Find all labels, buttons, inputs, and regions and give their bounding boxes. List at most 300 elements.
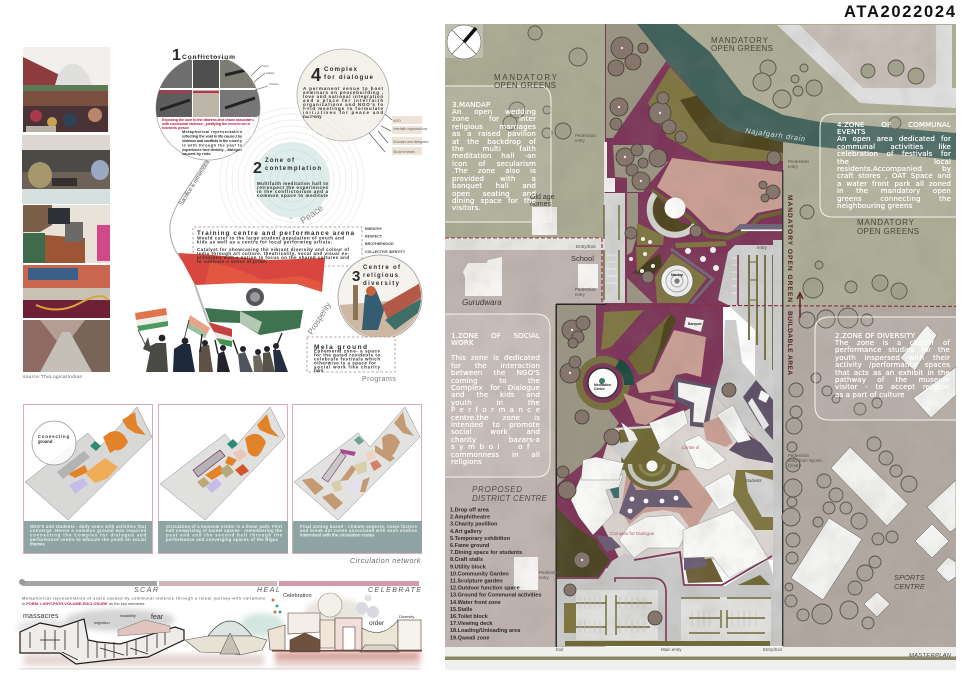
journey description: in FORM, LIGHT,PATH,VOLUME,ENCLOSURE as the key elements.: [22, 601, 145, 606]
value labels: COLLECTIVE IDENTITY: [365, 250, 406, 254]
zone text: social work: 1.ZONE OF SOCIAL: [451, 331, 540, 340]
bottom olive band: [565, 641, 770, 646]
texture overlay: [445, 24, 956, 647]
caption panel: [293, 521, 422, 553]
heading centre of religious diversity: religious: [363, 273, 399, 279]
flower garden parcel: [675, 241, 727, 248]
complex description: initiatives for peace and: [303, 110, 383, 115]
value labels: EMPATHY: [365, 227, 383, 231]
caption text: [166, 524, 283, 542]
complex for dialogue: white buildings: [571, 457, 768, 578]
tree highlights: [569, 47, 661, 561]
program: mela ground: [307, 337, 395, 373]
arrows: user groups: [251, 64, 279, 90]
orange zones: [205, 414, 279, 480]
place labels: homes: [530, 201, 552, 208]
exterior trees: sports centre: [782, 308, 917, 629]
complex description: [303, 86, 384, 119]
zone text: social work: social work and: [451, 427, 540, 436]
training description: India through art culture, theatricality, vocal and visual ex-: [197, 251, 350, 256]
banquet hall: Banquet: [688, 322, 702, 326]
zone text: mandap: .The zone also is: [452, 166, 536, 175]
purple service band: [729, 433, 773, 463]
grey deck: [608, 440, 638, 460]
zone text: mandap: the multi faith: [452, 144, 536, 153]
entry labels: Centre: [788, 463, 802, 468]
zone text: diversity: [834, 330, 950, 399]
zone text: mandap: as a raised pavilion: [452, 129, 536, 138]
zone text: social work: intended to promote: [451, 420, 540, 429]
orange zones: [68, 412, 146, 478]
arrows: user groups: Adults: [266, 71, 275, 75]
journey labels: CELEBRATE: [368, 587, 423, 594]
lower pink plaza: [623, 393, 674, 425]
confetti cluster: [272, 598, 282, 614]
connecting ground circle: [32, 421, 76, 465]
place labels: [462, 194, 594, 307]
district centre legend: 2.Amphitheatre: [450, 515, 490, 521]
right parking bays: [681, 597, 771, 642]
label: sports centre: SPORTS: [894, 573, 925, 582]
heading mela ground: Mela ground: [314, 344, 367, 351]
caption text: Circulation of a museum visitor is a linear path- First: [166, 524, 283, 529]
entry labels: entry from Sports: [788, 458, 822, 463]
zone outline: diversity: [815, 317, 956, 420]
section keywords: order: [369, 620, 385, 627]
upper green parcel: [606, 24, 667, 138]
zone text: mandap: dining space for the: [452, 196, 536, 205]
zone text: communal events: residents.Accompanied by: [837, 164, 951, 173]
small grey parcel: [627, 193, 638, 255]
section keywords: Celebration: [283, 593, 312, 599]
heading complex for dialogue: for dialogue: [324, 74, 374, 81]
program 3: centre of religious diversity: [338, 255, 422, 340]
complex description: harmony: [303, 114, 322, 119]
connecting journey curve: [170, 150, 293, 272]
training description: [197, 236, 350, 264]
photo: seated musicians: [22, 135, 110, 204]
label: proposed district centre: PROPOSED: [472, 485, 522, 494]
centre label: Centre of: [682, 445, 700, 450]
place labels: Gurudwara: [462, 298, 502, 307]
caption text: halt comprising of tunnel spaces - remembering the: [166, 528, 283, 533]
zone text: communal events: craft stores , OAT Space and: [837, 171, 951, 180]
labels: mandatory open greens: MANDATORY: [711, 36, 769, 45]
scar segment: [22, 581, 157, 586]
contemplation description: common space to meditate: [257, 193, 329, 198]
zone text: social work: commonness in all: [451, 450, 540, 459]
zone text: diversity: The zone is a cluster of: [835, 338, 950, 347]
mela description: otherwise is a space for: [314, 360, 376, 366]
service strip: [733, 224, 783, 230]
drain label: Najafgarh drain: [745, 126, 806, 143]
section drawing: [17, 593, 422, 669]
arrows: user groups: Youth: [261, 64, 269, 68]
multi-faith olive ring: [576, 356, 630, 410]
heading zone of contemplation: contemplation: [265, 166, 321, 172]
entry labels: Entry/Exit: [763, 647, 783, 652]
label: prosperity: Prosperity: [306, 301, 333, 336]
celebration buildings: [268, 613, 421, 652]
parking stripes: [748, 398, 769, 430]
training description: Catalyst for showcasing the vibrant diversity and colour of: [197, 247, 350, 252]
conflictorium description: experience true divinity , dialogue: [182, 147, 243, 152]
heal ramps: [185, 636, 267, 655]
left parking border: [615, 578, 666, 642]
heading centre of religious diversity: [363, 265, 401, 287]
heading centre of religious diversity: Centre of: [363, 265, 401, 271]
photo strip: communities and gatherings: [22, 47, 110, 379]
conflictorium description: caused by riots: [182, 151, 211, 156]
banquet hall: [684, 317, 704, 332]
entry labels: Main entry: [661, 647, 682, 652]
number one: 1: [172, 47, 181, 64]
conflictorium description: [182, 129, 243, 156]
top right road: [777, 25, 956, 108]
stakeholder tags: Scholars and delegates: [393, 140, 429, 144]
drain: [637, 24, 956, 160]
red flag band: [178, 253, 325, 292]
place labels: Old age: [530, 194, 555, 201]
zone text: communal events: the local: [837, 157, 951, 166]
stakeholder tags: Student heads: [393, 150, 415, 154]
upper gallery roof: [118, 620, 170, 636]
green flag band: [205, 308, 303, 335]
entry labels: Pedestrian: [788, 159, 810, 164]
connecting ground label: [38, 434, 69, 444]
studio pink court: [703, 417, 733, 447]
mela description: fairs: [314, 368, 324, 373]
zone text: mandap: visitors.: [452, 203, 481, 212]
place labels: School: [571, 254, 594, 263]
site massing: [294, 407, 420, 520]
purple hatch court: [619, 480, 693, 520]
green pavilion: [90, 441, 101, 451]
caption panel: [158, 521, 288, 553]
firework tree: [318, 593, 342, 617]
district centre legend: 15.Stalls: [450, 607, 472, 613]
zone text: mandap: meditation hall -an: [452, 151, 536, 160]
lower olive parcel B: [628, 313, 676, 375]
journey description: [22, 596, 265, 606]
section keywords: massacres: [23, 613, 59, 620]
contemplation description: in the conflictorium and a: [257, 189, 329, 194]
caption text: past and and the second halt through the: [166, 532, 283, 538]
land: left green: [445, 24, 607, 238]
district centre legend: 16.Toilet block: [450, 614, 489, 620]
district centre legend: 6.Fame ground: [450, 543, 489, 549]
journey labels: SCAR: [134, 587, 159, 594]
journey labels: HEAL: [257, 587, 281, 594]
zone text: social work: between the NGO'S: [451, 368, 540, 377]
title: project code: ATA2022024: [844, 3, 956, 21]
section base: [272, 650, 422, 652]
bottom road: [445, 647, 956, 670]
zone text: communal events: An open area dedicated for: [837, 134, 951, 143]
conflictorium photo collage: [156, 60, 262, 117]
conflictorium description: is with through the past to: [182, 142, 243, 148]
section keywords: Instability: [120, 614, 136, 618]
fireworks: [356, 594, 379, 618]
gallery hatching: [30, 622, 165, 660]
zone outline: social work: [445, 314, 550, 477]
zone text: social work: WORK: [451, 338, 474, 347]
caption text: NGO'S and students - daily users with activities that: [30, 524, 147, 529]
graphic: indian flag and crowd: [135, 253, 325, 372]
zone outline: communal events: [820, 114, 956, 217]
road boundary strip: [773, 240, 783, 646]
dark garden cell: [632, 253, 662, 277]
lower parking ground: [556, 553, 773, 646]
entry labels: Pedestrian: [575, 287, 597, 292]
zone text: mandap: An open wedding: [452, 107, 536, 116]
zone text: social work: and the kids and: [451, 390, 540, 399]
district centre legend: 5.Temporary exhibition: [450, 536, 511, 542]
grey-green parcel by rotunda: [627, 278, 653, 303]
mandap arc: [650, 194, 695, 235]
compass: [445, 24, 483, 59]
site massing: [25, 407, 152, 520]
entry labels: entry: [575, 292, 586, 297]
zone text: social work: Complex for Dialogue: [451, 383, 540, 392]
zone text: social work: Performance: [451, 405, 544, 414]
grey hall: [57, 451, 90, 479]
zone text: mandap: open seating and: [452, 189, 536, 198]
zone text: communal events: celebration of festivals for: [837, 149, 951, 158]
entry labels: Pedestrian: [788, 453, 810, 458]
arrows: user groups: Visitors: [269, 82, 279, 86]
zone text: social work: youth in the: [451, 398, 540, 407]
tree parcel: [613, 145, 668, 192]
zone text: communal events: neighbouring greens: [837, 201, 912, 210]
sports centre buildings: [791, 325, 956, 617]
land: right green: [640, 24, 956, 307]
number four: 4: [311, 65, 321, 85]
labels: mandatory open greens: OPEN GREENS: [857, 227, 919, 236]
zone text: mandap: at the backdrop of: [452, 137, 536, 146]
water pool: [608, 485, 619, 498]
zone text: social work: centre.the zone is: [451, 413, 540, 422]
zone text: communal events: communal activities like: [837, 142, 951, 151]
mela description: for the gated residents to: [314, 352, 380, 358]
zone text: diversity: 2.ZONE OF DIVERSITY: [835, 330, 915, 340]
ashoka chakra: [246, 288, 264, 306]
heading training centre: Training centre and performance arena: [197, 230, 355, 237]
labels: mandatory open greens: MANDATORY: [494, 73, 558, 82]
zone text: communal events: greens connecting the: [837, 194, 951, 203]
zone text: mandap: religious marriages: [452, 122, 536, 131]
rotunda walkway: [671, 249, 713, 305]
lower site ground: [556, 304, 773, 577]
zone text: mandap: zone for inter: [452, 114, 536, 123]
journey labels: [134, 587, 423, 594]
complex description: A permanent venue to host: [303, 86, 384, 91]
mela description: social work like charity: [314, 364, 381, 370]
small white block: [758, 390, 770, 403]
caption text: and break out zones associated with each studios: [300, 528, 418, 533]
parcel maroon edge: [556, 545, 772, 585]
connecting ground label: Connecting: [38, 434, 69, 439]
amphitheatre: [624, 460, 680, 490]
entry road: [445, 239, 605, 250]
purple surround to music studio: [674, 378, 716, 428]
photo: panel discussion: [23, 265, 110, 318]
caption text: [30, 524, 147, 546]
complex label: Complex for Dialogue: [610, 531, 655, 536]
district centre legend: 11.Sculpture garden: [450, 578, 503, 584]
silhouettes of people: [143, 333, 288, 372]
connecting ground label: ground: [38, 439, 53, 444]
conflictorium description: reflecting the void in life caused by: [182, 134, 243, 138]
site massing: [160, 407, 285, 520]
land: top right pink parcel: [800, 25, 936, 88]
celebrate segment: [279, 581, 419, 586]
labels: mandatory open greens: MANDATORY: [857, 218, 915, 227]
zone text: social work: coming to the: [451, 376, 540, 385]
caption: programs: Programs: [362, 376, 396, 383]
rotunda: [661, 265, 693, 297]
contemplation description: [257, 181, 329, 198]
district centre legend: 17.Viewing deck: [450, 621, 493, 627]
value labels: [365, 227, 406, 254]
site ground: [605, 24, 783, 307]
garden lattice: [684, 558, 723, 583]
festival photo: [340, 283, 421, 337]
vertical label: mandatory open green: MANDATORY OPEN GREEN: [786, 195, 793, 302]
heading complex for dialogue: Complex: [324, 66, 358, 73]
district centre legend: 7.Dining space for students: [450, 550, 522, 556]
student parking label: Students: [745, 478, 762, 483]
district centre legend: 13.Ground for Communal activities: [450, 593, 541, 599]
heal segment: [159, 581, 277, 586]
diagram 2: museum visitor circulation: [158, 404, 288, 554]
entry labels: Pedestrian: [575, 133, 597, 138]
left parking strip: [604, 193, 625, 303]
site boundary dashes: [445, 238, 956, 306]
conflictorium description: violence and conflicts in the country: [182, 138, 243, 143]
lower left green parcel: [557, 305, 619, 485]
east olive and student parking: [733, 470, 773, 530]
zone text: social work: This zone is dedicated: [451, 353, 540, 362]
rotunda parcel: [655, 253, 707, 303]
heading conflictorium: Conflictorium: [182, 54, 235, 61]
training description: pressions with a notion to focus on the shared cultures and: [197, 255, 349, 260]
label: proposed district centre: DISTRICT CENTRE: [472, 494, 548, 503]
vertical label: buildable area: BUILDABLE AREA: [786, 311, 793, 375]
caption text: converge .Hence a common ground was required: [30, 528, 146, 533]
journey description: Metaphorical representation of scars caused by communal violence through a linear journey-with variations: [22, 596, 265, 600]
middle small flag: [184, 315, 210, 340]
zone text: diversity: pathway of the museum: [835, 375, 950, 384]
district centre legend: 9.Utility block: [450, 564, 487, 570]
upper olive parcel: [648, 67, 783, 161]
mela description: [314, 348, 381, 373]
complex description: hold meetings to formulate: [303, 106, 384, 111]
zone text: diversity: youth inspersed with their: [835, 353, 950, 362]
exterior trees: greens: [503, 26, 924, 299]
number two: 2: [253, 160, 262, 177]
mandap circle: [664, 198, 686, 218]
olive crescent below plaza: [652, 190, 783, 238]
white studio buildings: [621, 382, 751, 470]
label: masterplan: MASTERPLAN: [909, 653, 952, 659]
labels: mandatory open greens: OPEN GREENS: [494, 81, 556, 90]
land: right pink: [783, 307, 956, 647]
diagram 3: final zoning: [292, 404, 422, 554]
program 2: zone of contemplation: [220, 108, 364, 252]
red statement: Exposing the user to the distress and chaos associated: [162, 117, 255, 122]
red statement: [161, 117, 255, 130]
performance block: [85, 458, 118, 483]
labels: mandatory open greens: [494, 36, 919, 236]
zone text: communal events: in the mandatory open: [837, 186, 951, 195]
section keywords: migration: [94, 621, 110, 625]
rotunda: Mandap: [671, 273, 683, 277]
purple forecourt: [596, 535, 621, 552]
dark olive wedge: [680, 92, 783, 153]
caption text: themes: [30, 542, 45, 546]
zone text: mandap: icon of secularism: [452, 159, 536, 168]
zone text: social work: charity bazars-a: [451, 435, 540, 444]
heading complex for dialogue: [324, 66, 374, 81]
photo source: source:TheLogicalIndian: [23, 374, 82, 379]
number three: 3: [352, 268, 360, 285]
value labels: RESPECT: [365, 234, 383, 238]
caption text: performance and converging spaces of the Rigas: [166, 537, 279, 542]
red statement: towards peace: [162, 125, 190, 130]
contemplation description: Multifaith meditation hall to: [257, 181, 328, 186]
section keywords: Diversity: [399, 614, 414, 619]
mandap garden: [652, 192, 691, 232]
central courtyard: [621, 470, 713, 527]
mela description: celebrate festivals which: [314, 356, 380, 362]
olive garden west: [624, 447, 690, 472]
photo: craft market stalls: [23, 205, 110, 263]
zone text: communal events: a water front park all zoned: [837, 179, 951, 188]
training description: kids as well as a centre for local performing artists.: [197, 240, 332, 244]
program 4: complex for dialogue: [297, 49, 429, 155]
zone text: diversity: activity /performance spaces: [835, 360, 950, 369]
entry kiosk: [604, 142, 615, 192]
zone text: mandap: 3.MANDAP: [452, 100, 490, 108]
masterplan: [445, 24, 956, 670]
district centre legend: 10.Community Garden: [450, 571, 509, 577]
ramp: [650, 395, 676, 404]
left small flag: [135, 308, 168, 346]
caption text: performance centre to educate the youth on social: [30, 537, 146, 542]
neighbouring white buildings: [463, 207, 598, 590]
red statement: with communal violence , justifying the need to work: [161, 121, 251, 126]
contemplation description: retrospect the experiences: [257, 185, 329, 190]
entry labels: Entry/Exit: [576, 244, 596, 249]
zone text: diversity: as a part of culture: [835, 390, 905, 399]
zone text: diversity: visitor - to accept religion: [835, 382, 950, 391]
complex description: and a place for interfaith: [303, 98, 383, 103]
stakeholder tags: [392, 116, 429, 155]
zone text: diversity: performance studios for the: [835, 345, 950, 354]
entry labels: entry: [788, 164, 799, 169]
caption text: intermixed with the circulation routes: [300, 532, 375, 538]
district centre legend: 8.Craft stalls: [450, 557, 483, 563]
olive triangle: [738, 575, 770, 585]
label: sports centre: [894, 573, 926, 591]
district centre legend: 18.Loading/Unloading area: [450, 628, 521, 634]
upper right parking: [718, 245, 773, 398]
entry labels: Exit: [556, 647, 564, 652]
value labels: BROTHERHOOD: [365, 242, 394, 246]
west court olive infill: [619, 428, 660, 470]
label: sacrifice and remembrance: Sacrifice & remembrance: [179, 152, 216, 207]
